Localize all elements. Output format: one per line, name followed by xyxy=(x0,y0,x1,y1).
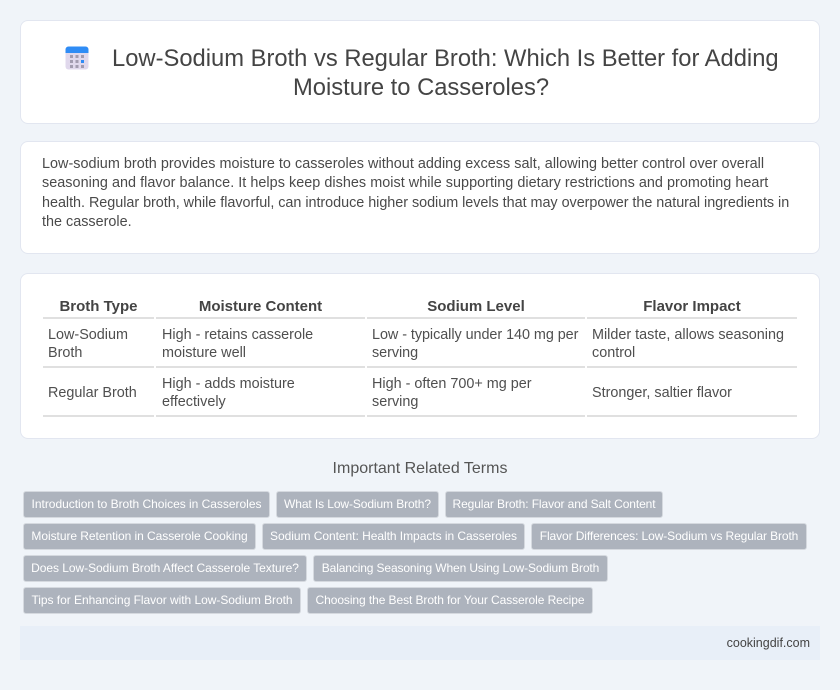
row 2 cell: sodium: serving xyxy=(372,394,418,410)
tag xyxy=(23,523,256,550)
tag xyxy=(23,555,307,582)
row 1 cell: type: Low-Sodium xyxy=(48,327,128,343)
row 1 cell: type xyxy=(48,327,128,361)
row 1 cell: moisture xyxy=(162,327,313,361)
row 1 cell: type: Broth xyxy=(48,345,82,361)
text block: description: the casserole. xyxy=(42,214,132,230)
tag xyxy=(531,523,807,550)
row 2 cell: sodium xyxy=(372,376,532,410)
tag xyxy=(23,587,301,614)
title: Moisture to Casseroles? xyxy=(293,74,549,101)
row 2 cell: moisture: effectively xyxy=(162,394,226,410)
table header: flavor impact xyxy=(587,298,797,319)
panel: comparison table xyxy=(20,273,820,439)
row 1 cell: sodium: serving xyxy=(372,345,418,361)
text block: description: Low-sodium broth provides moisture to casseroles without adding excess salt, allowing better control over overall xyxy=(42,156,764,172)
icon: calendar xyxy=(66,46,88,70)
text block: description: health. Regular broth, while flavorful, can introduce higher sodium levels that may overpower the natural ingredients in xyxy=(42,195,789,211)
row 1 cell: moisture: High - retains casserole xyxy=(162,327,313,343)
tag xyxy=(313,555,608,582)
row 1 cell: flavor: Milder taste, allows seasoning xyxy=(592,327,784,343)
tag: Flavor Differences: Low-Sodium vs Regular Broth xyxy=(540,529,798,543)
table header: broth type: Broth Type xyxy=(59,298,138,315)
heading: important related terms: Important Related Terms xyxy=(333,460,507,477)
table header: broth type xyxy=(43,298,154,319)
panel: header xyxy=(20,20,820,124)
row 2 cell: moisture xyxy=(162,376,295,410)
footer text: cookingdif.com xyxy=(727,636,810,650)
tag xyxy=(276,491,439,518)
tag xyxy=(23,491,270,518)
tag: Choosing the Best Broth for Your Casserole Recipe xyxy=(316,593,584,607)
row 1 cell: moisture: moisture well xyxy=(162,345,246,361)
title: Low-Sodium Broth vs Regular Broth: Which Is Better for Adding xyxy=(112,45,779,72)
tag xyxy=(307,587,593,614)
table header: moisture content: Moisture Content xyxy=(199,298,322,315)
row 1 cell: flavor xyxy=(592,327,784,361)
table header: flavor impact: Flavor Impact xyxy=(643,298,741,315)
tag: Sodium Content: Health Impacts in Casseroles xyxy=(270,529,517,543)
panel: description xyxy=(20,141,820,254)
row 1 cell: flavor: control xyxy=(592,345,635,361)
tag: Does Low-Sodium Broth Affect Casserole Texture? xyxy=(31,561,299,575)
row 2 cell: moisture: High - adds moisture xyxy=(162,376,295,392)
table header: sodium level: Sodium Level xyxy=(427,298,525,315)
title xyxy=(112,45,779,101)
table header: sodium level xyxy=(367,298,585,319)
tag: Introduction to Broth Choices in Casseroles xyxy=(32,497,261,511)
footer bar xyxy=(20,626,820,660)
tag: Moisture Retention in Casserole Cooking xyxy=(31,529,248,543)
row 1 cell: sodium xyxy=(372,327,578,361)
tag: Balancing Seasoning When Using Low-Sodium Broth xyxy=(322,561,599,575)
tag xyxy=(262,523,525,550)
row 2 cell: sodium: High - often 700+ mg per xyxy=(372,376,532,392)
table header: moisture content xyxy=(156,298,365,319)
row 2 cell: type: Regular Broth xyxy=(48,385,137,401)
tag: Tips for Enhancing Flavor with Low-Sodium Broth xyxy=(31,593,293,607)
tag: What Is Low-Sodium Broth? xyxy=(284,497,431,511)
text block: description xyxy=(42,156,789,230)
tag xyxy=(445,491,663,518)
text block: description: seasoning and flavor balance. It helps keep dishes moist while supporting dietary restrictions and promoting heart xyxy=(42,175,768,191)
row 2 cell: flavor: Stronger, saltier flavor xyxy=(592,385,732,401)
tag: Regular Broth: Flavor and Salt Content xyxy=(452,497,655,511)
row 1 cell: sodium: Low - typically under 140 mg per xyxy=(372,327,578,343)
